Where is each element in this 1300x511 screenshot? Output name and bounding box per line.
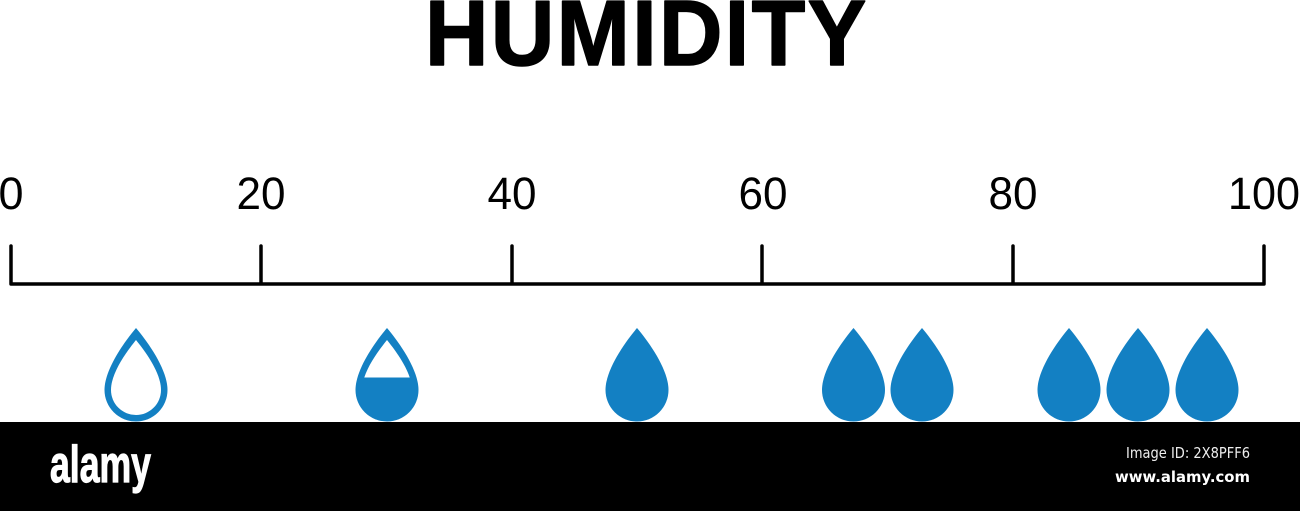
footer bar [0, 422, 1300, 511]
icon: three full drops [1038, 328, 1238, 422]
icon: empty drop [104, 328, 168, 422]
scale labels: 80 [988, 168, 1038, 219]
icon: full drop [606, 328, 668, 422]
scale labels: 60 [738, 168, 788, 219]
scale labels: 20 [236, 168, 286, 219]
scale labels [0, 168, 1300, 219]
footer logo: alamy [50, 436, 151, 494]
scale axis [11, 246, 1264, 284]
icon: two full drops [822, 328, 954, 422]
website: www.alamy.com [1115, 468, 1250, 486]
scale labels: 40 [488, 168, 536, 219]
image id: Image ID: 2X8PFF6 [1126, 444, 1250, 462]
icon: half-filled drop [356, 328, 418, 422]
